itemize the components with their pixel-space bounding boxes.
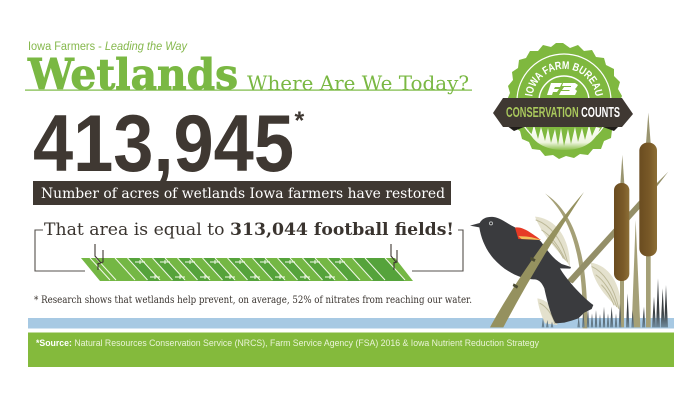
farm bureau logo — [547, 83, 578, 95]
footnote: * Research shows that wetlands help prevent, on average, 52% of nitrates from reaching our water. — [34, 295, 472, 306]
goal post left — [95, 244, 103, 270]
bird — [470, 217, 593, 323]
seal rings — [539, 76, 589, 126]
subtitle: Where Are We Today?: Where Are We Today? — [247, 71, 469, 95]
footer band — [28, 332, 674, 367]
goal post right — [391, 244, 397, 270]
bird and perch reed — [470, 192, 593, 327]
perch reed — [490, 192, 584, 327]
title: Wetlands: Wetlands — [27, 50, 238, 99]
caption bar — [33, 181, 451, 205]
ribbon — [493, 98, 633, 127]
football field — [81, 258, 413, 281]
footer band: *Source: Natural Resources Conservation Service (NRCS), Farm Service Agency (FSA) 2016 & Iowa Nutrient Reduction Strategy — [36, 338, 539, 348]
kicker: Iowa Farmers - Leading the Way: Iowa Farmers - Leading the Way — [28, 41, 188, 53]
plumes — [535, 217, 621, 325]
badge: Iowa Farm Bureau Conservation Counts — [493, 43, 633, 159]
caption bar: Number of acres of wetlands Iowa farmers have restored — [41, 186, 445, 202]
seal arc text: IOWA FARM BUREAU — [524, 61, 604, 96]
grass — [527, 125, 600, 150]
bracket lines — [35, 230, 463, 271]
title underline — [25, 90, 472, 91]
scalloped seal — [507, 43, 622, 159]
cattail heads — [639, 143, 657, 256]
ribbon text: CONSERVATION COUNTS — [506, 104, 620, 121]
water strip — [28, 318, 674, 328]
blades and stems — [545, 113, 668, 328]
dark grass — [542, 278, 668, 327]
big number: 413,945: 413,945 — [33, 99, 294, 189]
illustration: cattails, reeds and bird — [470, 113, 668, 328]
comparison headline: That area is equal to 313,044 football fields! — [44, 220, 454, 240]
reed knots — [513, 257, 536, 289]
asterisk: * — [294, 107, 304, 135]
ribbon folds — [503, 123, 622, 131]
